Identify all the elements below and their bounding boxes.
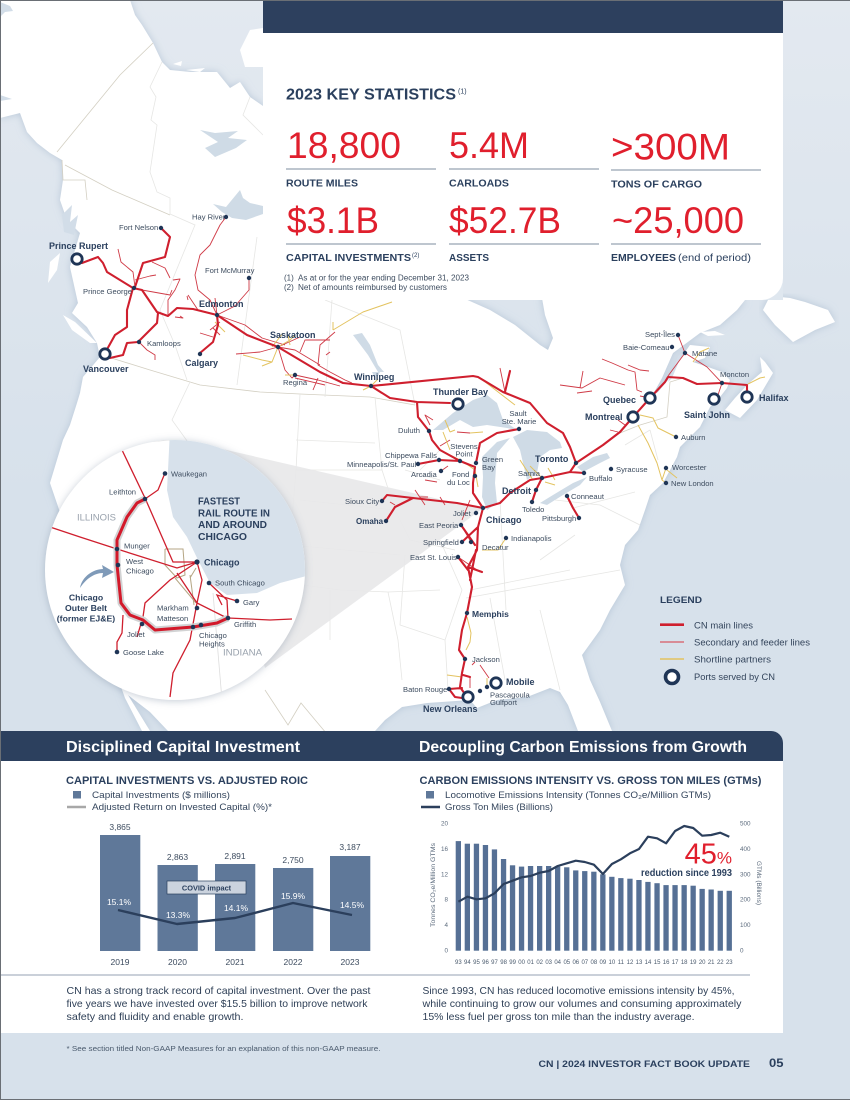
map: city labels: New Orleans <box>423 704 478 714</box>
inset: labels: Chicago <box>126 566 154 576</box>
stat: route miles: ROUTE MILES <box>286 178 358 189</box>
CN main lines <box>82 228 371 386</box>
panel: bottom white background <box>0 755 783 1033</box>
map: city labels: Baton Rouge <box>403 685 447 694</box>
map: city labels: Quebec <box>603 395 636 405</box>
stat: employees: (end of period) <box>678 253 751 264</box>
inset: labels: Chicago <box>199 631 227 640</box>
left axis: 8 <box>444 896 448 904</box>
map: city labels: Decatur <box>482 543 509 552</box>
stat: capital investments <box>286 200 436 264</box>
legend <box>660 595 810 684</box>
map: city labels: Omaha <box>356 517 384 526</box>
x axis labels: 95 <box>473 960 480 966</box>
map: city labels: Auburn <box>681 433 706 442</box>
legend: CN main lines <box>694 620 753 630</box>
chart legend: Gross Ton Miles (Billions) <box>445 801 553 812</box>
text block: capital investment: safety and fluidity and enable growth. <box>66 1012 243 1023</box>
right axis <box>740 820 751 954</box>
bars <box>100 835 370 951</box>
x axis labels: 11 <box>618 960 625 966</box>
footnote: * See section titled Non-GAAP Measures for an explanation of this non-GAAP measure. <box>66 1044 380 1053</box>
map: city labels: Bay <box>482 463 495 472</box>
inset: labels: South Chicago <box>215 578 265 588</box>
bar values: 2,891 <box>224 851 246 861</box>
map: gray callout wedge <box>205 445 482 668</box>
map: city labels: Matane <box>692 349 717 358</box>
legend: LEGEND <box>660 595 702 606</box>
map: city labels: Indianapolis <box>511 534 552 543</box>
left axis: 16 <box>441 846 448 853</box>
inset: labels: West <box>126 557 144 566</box>
bar values: 2,750 <box>282 855 304 865</box>
left axis: 20 <box>441 820 448 828</box>
panel: key statistics <box>263 0 783 300</box>
footer: CN | 2024 INVESTOR FACT BOOK UPDATE <box>538 1059 751 1070</box>
x axis labels: 07 <box>581 960 589 966</box>
map: city labels: Prince Rupert <box>49 241 108 251</box>
stat: capital investments: CAPITAL INVESTMENTS <box>286 253 411 264</box>
map: city labels: Detroit <box>502 486 531 496</box>
right axis: 0 <box>740 948 744 954</box>
map: city labels: Thunder Bay <box>433 387 488 397</box>
panel: capital investments chart <box>66 775 370 967</box>
x axis labels: 16 <box>663 960 670 966</box>
map: city labels: Kamloops <box>147 339 181 348</box>
x axis labels: 09 <box>600 960 607 966</box>
map: city labels: Prince George <box>83 287 132 296</box>
inset: labels: INDIANA <box>223 648 263 658</box>
inset: heading: RAIL ROUTE IN <box>198 508 270 520</box>
chart legend: Locomotive Emissions Intensity (Tonnes CO₂e/Million GTMs) <box>445 789 711 800</box>
map: city labels: New London <box>671 479 714 488</box>
legend: Shortline partners <box>694 654 771 664</box>
x axis labels: 98 <box>500 960 508 966</box>
footnotes: Net of amounts reimbursed by customers <box>298 283 447 292</box>
map: city labels: Winnipeg <box>354 372 394 382</box>
header bar <box>263 0 783 33</box>
x axis labels: 13 <box>636 960 643 966</box>
map: city labels: Regina <box>283 378 308 387</box>
map: city labels: Arcadia <box>411 470 438 479</box>
panel: carbon emissions chart <box>420 775 762 966</box>
x axis labels: 02 <box>536 960 544 966</box>
map: city labels: Toledo <box>522 505 544 514</box>
map: city labels: Ste. Marie <box>502 417 536 426</box>
left axis: 0 <box>444 948 448 954</box>
map: city labels: Duluth <box>398 426 420 435</box>
45% callout <box>641 838 732 879</box>
45% callout: 45% <box>685 838 732 870</box>
footnotes: As at or for the year ending December 31, 2023 <box>298 274 470 282</box>
x axis labels: 93 <box>455 960 462 966</box>
inset: heading <box>198 496 270 543</box>
map: city labels: Fort McMurray <box>205 266 255 275</box>
map: city labels: Gulfport <box>490 698 518 707</box>
map: city labels: Minneapolis/St. Paul <box>347 460 417 469</box>
stat: assets: $52.7B <box>449 200 561 241</box>
chart title: CARBON EMISSIONS INTENSITY VS. GROSS TON MILES (GTMs) <box>420 775 762 787</box>
inset: rail lines <box>50 450 292 697</box>
ROIC line <box>118 903 352 924</box>
inset: outer belt callout: Chicago <box>69 592 103 602</box>
years: 2023 <box>341 957 360 967</box>
stat: capital investments: (2) <box>412 253 419 259</box>
text block: emissions: 15% less fuel per gross ton mile than the industry average. <box>422 1012 694 1023</box>
map: city labels: Vancouver <box>83 364 129 374</box>
stat: tons of cargo <box>611 126 761 190</box>
x axis labels: 19 <box>690 960 697 966</box>
left axis: 4 <box>444 922 448 929</box>
map: city labels: Saint John <box>684 410 730 420</box>
x axis labels: 14 <box>645 960 652 966</box>
x axis labels: 99 <box>509 960 517 966</box>
ROIC values: 13.3% <box>166 910 190 920</box>
right axis: 200 <box>740 896 751 904</box>
right axis: 400 <box>740 846 751 853</box>
inset: outer belt callout: Outer Belt <box>65 603 107 613</box>
stat: route miles <box>286 125 436 189</box>
inset: heading: FASTEST <box>198 496 240 508</box>
x axis labels: 15 <box>654 960 661 966</box>
bar values <box>109 822 361 865</box>
inset: heading: AND AROUND <box>198 520 267 531</box>
inset: labels: Joliet <box>127 630 146 639</box>
gross ton miles line <box>458 826 729 902</box>
x axis labels: 23 <box>726 960 733 966</box>
right axis: 100 <box>740 922 751 929</box>
map: city labels: Worcester <box>672 463 707 472</box>
right axis: 500 <box>740 820 751 828</box>
years: 2021 <box>226 957 245 967</box>
map: city labels: Hay River <box>192 212 226 222</box>
map: rail network <box>82 217 765 698</box>
map: city labels: Chippewa Falls <box>385 451 437 460</box>
stat: assets: ASSETS <box>449 253 489 264</box>
left axis <box>441 820 448 954</box>
bars <box>456 841 732 951</box>
map: city labels: Springfield <box>423 538 459 547</box>
inset: heading: CHICAGO <box>198 532 247 543</box>
inset: labels: Heights <box>199 640 225 648</box>
map: city labels: Green <box>482 455 503 464</box>
map: city labels: Toronto <box>535 454 569 464</box>
inset: labels: Markham <box>157 604 189 612</box>
map: city labels: du Loc <box>447 478 470 487</box>
stat: carloads <box>449 125 599 189</box>
inset: labels: Chicago <box>204 558 240 568</box>
text block: emissions <box>421 986 742 1023</box>
years <box>111 957 360 967</box>
map: city labels <box>49 212 789 714</box>
x axis labels: 08 <box>591 960 598 966</box>
years: 2019 <box>111 957 130 967</box>
stat: carloads: CARLOADS <box>449 178 509 189</box>
map: city labels: East Peoria <box>419 521 459 530</box>
inset: labels: Gary <box>243 598 260 607</box>
inset: labels: Griffith <box>234 620 256 629</box>
inset: labels: Munger <box>124 542 150 550</box>
text block: emissions: while continuing to grow our volumes and consuming approximately <box>421 999 742 1010</box>
inset: outer belt callout: (former EJ&E) <box>57 614 115 624</box>
map: city labels: Sioux City <box>345 497 379 506</box>
45% callout: reduction since 1993 <box>641 868 732 879</box>
map: land and water <box>0 0 835 740</box>
stat: capital investments: $3.1B <box>287 200 379 241</box>
map: city labels: Halifax <box>759 393 789 403</box>
map: city labels: Pascagoula <box>490 690 530 700</box>
inset: Lake Michigan <box>167 430 310 595</box>
map: city labels: Point <box>455 450 474 458</box>
inset: labels: Matteson <box>157 614 188 623</box>
map: city labels: Baie-Comeau <box>623 343 669 352</box>
chart legend: Adjusted Return on Invested Capital (%)* <box>92 801 272 812</box>
ROIC values: 14.5% <box>340 900 364 910</box>
map: city labels: Calgary <box>185 358 218 368</box>
x axis labels: 05 <box>563 960 571 966</box>
x axis labels: 03 <box>545 960 553 966</box>
x axis labels: 12 <box>627 960 634 966</box>
ROIC values: 15.1% <box>107 897 131 907</box>
map: city labels: Buffalo <box>589 474 613 483</box>
inset: Chicago Outer Belt <box>117 499 228 630</box>
x axis labels: 00 <box>518 960 526 966</box>
x axis labels: 01 <box>527 960 535 966</box>
stat: tons of cargo: TONS OF CARGO <box>611 179 702 190</box>
x axis labels: 96 <box>482 960 489 966</box>
x axis labels: 04 <box>554 960 562 966</box>
inset: arrow <box>80 565 114 588</box>
heading: (1) <box>458 88 467 96</box>
inset: labels <box>77 470 265 658</box>
stat: carloads: 5.4M <box>449 125 529 166</box>
text block: capital investment <box>66 986 371 1023</box>
x axis labels: 22 <box>717 960 724 966</box>
map: city labels: Fort Nelson <box>119 223 158 232</box>
map: city labels: Mobile <box>506 677 534 687</box>
bar values: 3,865 <box>109 822 131 832</box>
left axis title: Tonnes CO₂e/Million GTMs <box>430 843 437 927</box>
stat: employees: EMPLOYEES <box>611 253 676 264</box>
map: city labels: Sault <box>509 409 528 418</box>
x axis labels <box>455 960 733 966</box>
COVID impact box <box>167 881 246 894</box>
ROIC values: 15.9% <box>281 891 305 901</box>
map: city labels: Memphis <box>472 609 509 619</box>
text block: emissions: Since 1993, CN has reduced locomotive emissions intensity by 45%, <box>422 986 734 997</box>
footer: 05 <box>769 1056 784 1070</box>
years: 2022 <box>284 957 303 967</box>
section header band <box>0 731 783 761</box>
section header band: Decoupling Carbon Emissions from Growth <box>419 739 747 756</box>
map: city labels: Chicago <box>486 515 522 525</box>
map: city labels: East St. Louis <box>410 553 457 562</box>
chart legend <box>67 789 272 812</box>
inset: labels: Waukegan <box>171 470 207 478</box>
chart legend: Capital Investments ($ millions) <box>92 789 230 800</box>
x axis labels: 17 <box>672 960 679 966</box>
bar values: 2,863 <box>167 852 188 862</box>
map: city labels: Sept-Îles <box>645 330 675 339</box>
x axis labels: 97 <box>491 960 498 966</box>
map: city labels: Saskatoon <box>270 330 316 340</box>
legend: Secondary and feeder lines <box>694 636 810 648</box>
map: city markers <box>132 215 724 693</box>
years: 2020 <box>168 957 187 967</box>
chart title: CAPITAL INVESTMENTS VS. ADJUSTED ROIC <box>66 775 308 787</box>
map: city labels: Edmonton <box>199 299 244 309</box>
inset: labels: Leithton <box>109 488 136 496</box>
heading: 2023 KEY STATISTICS <box>286 86 456 104</box>
shortline partners <box>215 302 765 687</box>
x axis labels: 18 <box>681 960 688 966</box>
left axis: 12 <box>441 872 448 878</box>
stat: employees <box>611 200 761 264</box>
right axis title: GTMs (Billions) <box>755 861 762 905</box>
legend: Ports served by CN <box>694 671 775 682</box>
stat: employees: ~25,000 <box>612 200 744 241</box>
inset: labels: Goose Lake <box>123 648 164 657</box>
ROIC values <box>107 891 364 920</box>
map: city labels: Pittsburgh <box>542 514 576 523</box>
stat: route miles: 18,800 <box>287 125 401 166</box>
inset: outer belt callout <box>57 592 115 624</box>
footnotes <box>284 274 470 292</box>
x axis labels: 94 <box>464 960 471 966</box>
right axis: 300 <box>740 872 751 878</box>
x axis labels: 10 <box>609 960 616 966</box>
map: city labels: Joliet <box>453 509 472 518</box>
text block: capital investment: CN has a strong track record of capital investment. Over the past <box>66 986 371 997</box>
section header band: Disciplined Capital Investment <box>66 739 300 756</box>
stat: tons of cargo: >300M <box>611 126 730 168</box>
map: city labels: Fond <box>452 470 469 479</box>
map: city labels: Moncton <box>720 370 749 379</box>
secondary and feeder lines <box>118 217 352 390</box>
map: city labels: Sarnia <box>518 469 541 478</box>
x axis labels: 06 <box>572 960 580 966</box>
footnotes: (2) <box>284 283 294 292</box>
x axis labels: 21 <box>708 960 715 966</box>
footer <box>538 1056 784 1070</box>
map: city labels: Jackson <box>472 655 500 664</box>
text block: capital investment: five years we have invested over $15.5 billion to improve network <box>66 999 368 1010</box>
map: city labels: Conneaut <box>571 492 605 501</box>
inset map: Chicago circle <box>45 430 310 700</box>
x axis labels: 20 <box>699 960 706 966</box>
ROIC values: 14.1% <box>224 903 248 913</box>
footnotes: (1) <box>284 274 294 282</box>
map: city labels: Montreal <box>585 412 623 422</box>
map: port markers <box>72 254 752 702</box>
inset: points <box>115 471 239 654</box>
COVID impact box: COVID impact <box>182 884 232 892</box>
map: city labels: Syracuse <box>616 465 648 474</box>
bar values: 3,187 <box>339 842 361 852</box>
inset: labels: ILLINOIS <box>77 512 116 522</box>
stat: assets <box>449 200 599 264</box>
map: city labels: Stevens <box>450 442 478 451</box>
chart legend <box>421 789 711 812</box>
